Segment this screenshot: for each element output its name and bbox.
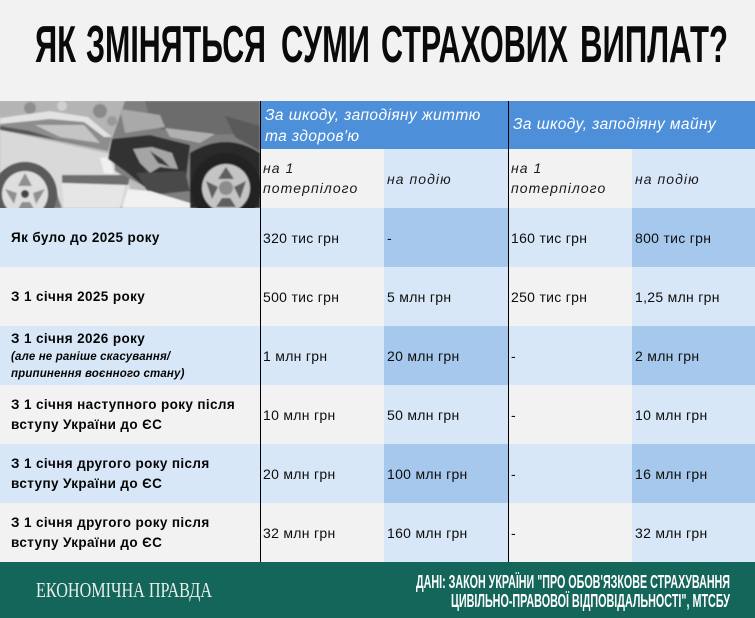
title: ЗМІНЯТЬСЯ [86, 16, 266, 74]
icon: left wheel [0, 162, 57, 226]
row: before 2025 [0, 208, 755, 267]
icon: right wheel [191, 153, 261, 223]
row: from 1 January 2026: 2 млн грн [635, 348, 699, 364]
title: СУМИ [281, 16, 370, 74]
row: from 1 January 2025 [11, 267, 755, 326]
row: from 1 January 2025: 500 тис грн [263, 288, 339, 304]
row: before 2025: 160 тис грн [511, 230, 587, 246]
source [416, 572, 730, 611]
subheader: per event, life [384, 149, 508, 208]
title: СТРАХОВИХ [381, 16, 568, 74]
subheader: per victim, property [509, 149, 632, 208]
subheader: per victim, property: на 1 [511, 160, 542, 176]
row: second year after EU accession, final amounts: 160 млн грн [387, 524, 468, 540]
header: life and health [261, 101, 508, 149]
row: from 1 January 2026 [0, 326, 755, 385]
row: second year after EU accession: - [511, 466, 516, 482]
subheader: per event, life: на подію [387, 170, 452, 186]
photo: car crash [0, 101, 260, 208]
row: from 1 January 2026: припинення воєнного стану) [11, 368, 185, 380]
row: second year after EU accession [0, 444, 755, 503]
row: second year after EU accession, final amounts: - [511, 524, 516, 540]
header: property [509, 101, 755, 149]
row: from 1 January 2026: 20 млн грн [387, 348, 460, 364]
row: from 1 January 2025: 250 тис грн [511, 288, 587, 304]
row: second year after EU accession: 20 млн грн [263, 466, 336, 482]
row: next year after EU accession [11, 385, 755, 444]
row: from 1 January 2025: 5 млн грн [387, 288, 451, 304]
header: property: За шкоду, заподіяну майну [513, 116, 716, 133]
row: second year after EU accession, final amounts: З 1 січня другого року після [11, 514, 210, 530]
row: from 1 January 2026: З 1 січня 2026 року [11, 331, 145, 346]
header: life and health: та здоров'ю [265, 128, 359, 145]
row: second year after EU accession, final amounts: вступу України до ЄС [11, 534, 162, 550]
row: before 2025: - [387, 230, 392, 246]
header: life and health: За шкоду, заподіяну життю [265, 107, 481, 124]
row: second year after EU accession, final amounts [11, 503, 755, 562]
footer [0, 562, 755, 618]
subheader: per victim, life [261, 149, 384, 208]
row: before 2025: 320 тис грн [263, 230, 339, 246]
row: second year after EU accession: 16 млн грн [635, 466, 708, 482]
row: next year after EU accession: - [511, 406, 516, 422]
row: second year after EU accession, final amounts: 32 млн грн [263, 524, 336, 540]
table [0, 101, 755, 562]
row: before 2025: 800 тис грн [635, 230, 711, 246]
row: next year after EU accession: 10 млн грн [635, 406, 708, 422]
row: from 1 January 2026: (але не раніше скасування/ [11, 351, 170, 363]
subheader: per victim, life: потерпілого [263, 180, 358, 196]
row: second year after EU accession: З 1 січня другого року після [11, 456, 210, 470]
subheader: per victim, property: потерпілого [511, 180, 606, 196]
row: from 1 January 2026: - [511, 348, 516, 364]
subheader: per event, property [632, 149, 755, 208]
row: from 1 January 2026: 1 млн грн [263, 348, 327, 364]
title: ЯК [35, 16, 76, 74]
row: second year after EU accession: вступу України до ЄС [11, 476, 162, 490]
logo: Економічна правда: ЕКОНОМІЧНА ПРАВДА [36, 578, 213, 602]
row: next year after EU accession: 10 млн грн [263, 406, 336, 422]
title [35, 16, 728, 74]
row: second year after EU accession, final amounts: 32 млн грн [635, 524, 708, 540]
row: before 2025: Як було до 2025 року [11, 230, 160, 244]
row: from 1 January 2025: 1,25 млн грн [635, 288, 720, 304]
row: second year after EU accession: 100 млн грн [387, 466, 468, 482]
row: next year after EU accession: вступу України до ЄС [11, 416, 162, 432]
subheader: per event, property: на подію [635, 170, 700, 186]
row: from 1 January 2025: З 1 січня 2025 року [11, 288, 145, 304]
subheader: per victim, life: на 1 [263, 160, 294, 176]
row: next year after EU accession: 50 млн грн [387, 406, 460, 422]
row: next year after EU accession: З 1 січня наступного року після [11, 396, 235, 412]
